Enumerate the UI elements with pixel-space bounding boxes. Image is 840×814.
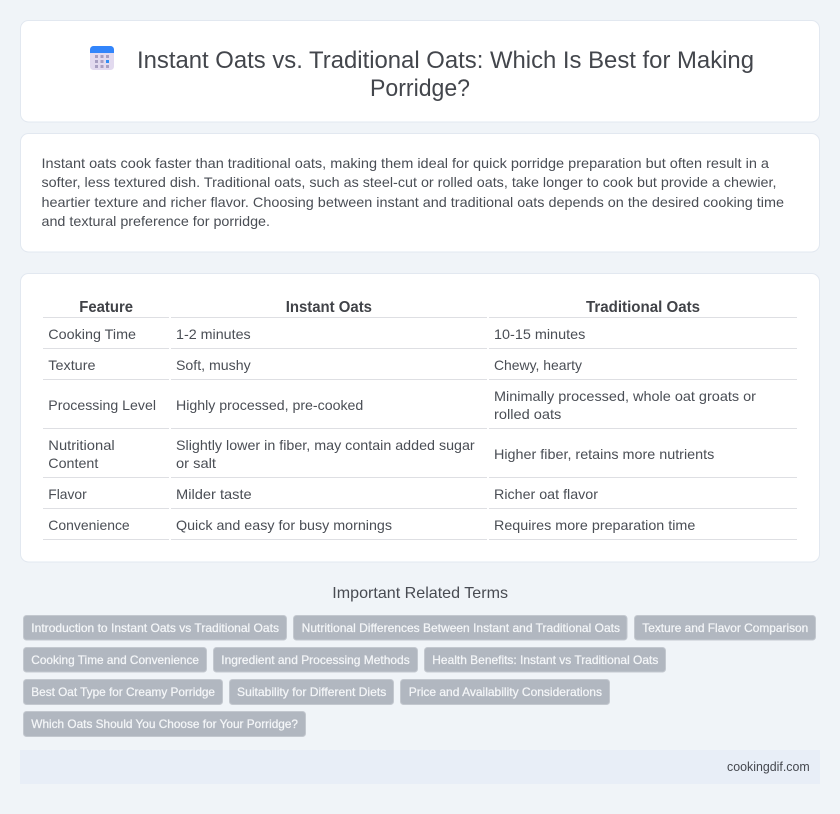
tag: creamy porridge xyxy=(24,680,222,704)
table row: processing level: Highly processed, pre-cooked xyxy=(176,397,363,413)
table row: cooking time xyxy=(43,326,797,349)
text block: summary paragraph xyxy=(42,155,784,229)
tag: health benefits: Health Benefits: Instant vs Traditional Oats xyxy=(432,653,658,667)
panel: introduction xyxy=(20,134,820,252)
footer xyxy=(20,750,820,784)
table header row xyxy=(43,299,797,318)
table row: nutritional content: Nutritional xyxy=(48,437,115,453)
tag: ingredient and processing: Ingredient and Processing Methods xyxy=(221,653,410,667)
table row: nutritional content: Slightly lower in fiber, may contain added sugar xyxy=(176,437,475,453)
tag: cooking time xyxy=(24,648,206,672)
table row: nutritional content: Content xyxy=(48,455,98,471)
table row: processing level xyxy=(43,388,797,429)
table header row: Feature xyxy=(79,299,133,316)
footer source text: cookingdif.com xyxy=(727,760,810,774)
tag: nutritional differences: Nutritional Differences Between Instant and Traditional Oats xyxy=(302,621,620,635)
tag: introduction: Introduction to Instant Oats vs Traditional Oats xyxy=(31,621,279,635)
tag: texture and flavor: Texture and Flavor Comparison xyxy=(642,621,808,635)
tag: price and availability xyxy=(400,680,610,704)
tag: ingredient and processing xyxy=(214,648,418,672)
table row: processing level: rolled oats xyxy=(494,406,561,422)
text block: summary paragraph: heartier texture and richer flavor. Choosing between instant and traditional oats depends on the desired cooking time xyxy=(42,194,784,210)
table row: texture: Chewy, hearty xyxy=(494,357,582,373)
tag: different diets: Suitability for Different Diets xyxy=(237,685,386,699)
table row: convenience: Quick and easy for busy mornings xyxy=(176,517,392,533)
table row: convenience xyxy=(43,517,797,540)
tag: cooking time: Cooking Time and Convenience xyxy=(31,653,199,667)
table row: convenience: Convenience xyxy=(48,517,130,533)
table row: flavor: Milder taste xyxy=(176,486,252,502)
tag: different diets xyxy=(230,680,394,704)
table row: texture: Texture xyxy=(48,357,96,373)
table row: flavor xyxy=(43,486,797,509)
table row: flavor: Flavor xyxy=(48,486,87,502)
related term tags xyxy=(24,616,816,736)
table row: processing level: Processing Level xyxy=(48,397,156,413)
table row: flavor: Richer oat flavor xyxy=(494,486,598,502)
table row: cooking time: Cooking Time xyxy=(48,326,136,342)
table header row: Traditional Oats xyxy=(586,299,700,316)
tag: texture and flavor xyxy=(634,616,816,640)
title xyxy=(137,47,754,102)
tag: introduction xyxy=(24,616,286,640)
tag: which oats: Which Oats Should You Choose for Your Porridge? xyxy=(31,717,298,731)
table row: nutritional content: or salt xyxy=(176,455,216,471)
table row: nutritional content: Higher fiber, retains more nutrients xyxy=(494,446,714,462)
table header row: Instant Oats xyxy=(286,299,372,316)
icon: calendar xyxy=(90,46,114,70)
panel: header xyxy=(20,20,820,122)
tag: which oats xyxy=(24,712,306,736)
table row: texture xyxy=(43,357,797,380)
tag: nutritional differences xyxy=(294,616,627,640)
text block: summary paragraph: and textural preference for porridge. xyxy=(42,213,270,229)
panel: comparison table xyxy=(20,274,820,562)
table row: cooking time: 10-15 minutes xyxy=(494,326,585,342)
table row: convenience: Requires more preparation time xyxy=(494,517,696,533)
tag: price and availability: Price and Availability Considerations xyxy=(409,685,602,699)
text block: summary paragraph: Instant oats cook faster than traditional oats, making them ideal for quick porridge preparation but often result in a xyxy=(42,155,769,171)
tag: creamy porridge: Best Oat Type for Creamy Porridge xyxy=(31,685,215,699)
text block: summary paragraph: softer, less textured dish. Traditional oats, such as steel-cut or rolled oats, take longer to cook but provide a chewier, xyxy=(42,174,776,190)
title: Instant Oats vs. Traditional Oats: Which Is Best for Making xyxy=(137,47,754,74)
heading: important related terms: Important Related Terms xyxy=(332,585,508,602)
title: Porridge? xyxy=(370,75,470,102)
table row: cooking time: 1-2 minutes xyxy=(176,326,251,342)
table row: texture: Soft, mushy xyxy=(176,357,251,373)
tag: health benefits xyxy=(424,648,666,672)
table row: processing level: Minimally processed, whole oat groats or xyxy=(494,388,756,404)
table row: nutritional content xyxy=(43,437,797,478)
